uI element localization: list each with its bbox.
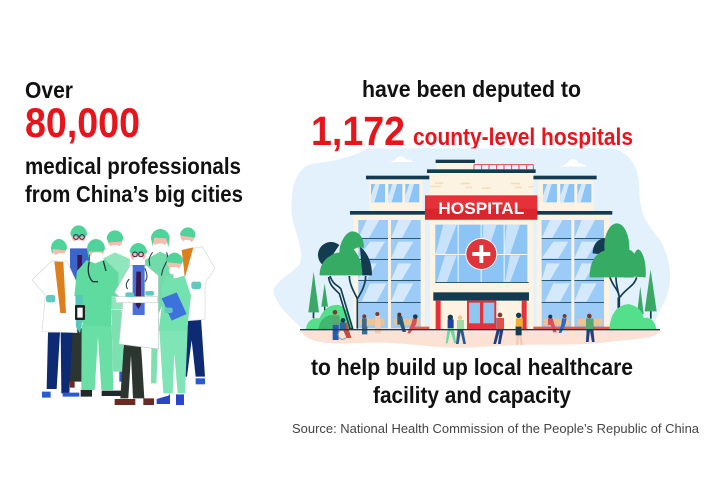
ground line <box>300 329 660 330</box>
heading: deputed to 1,172 county-level hospitals: have been deputed to <box>362 76 581 102</box>
hospital sign: HOSPITAL <box>438 199 524 218</box>
tree right <box>590 223 646 329</box>
central glass window <box>435 225 529 283</box>
icon: red cross <box>465 238 497 270</box>
tree left <box>318 231 372 329</box>
small cypress trees and bushes left <box>306 272 353 329</box>
ground <box>301 330 660 348</box>
figure: front green scrubs man <box>74 239 122 397</box>
heading: over 80,000 medical professionals: from China’s big cities <box>25 181 243 207</box>
heading: deputed to 1,172 county-level hospitals: 1,172 <box>311 108 405 154</box>
figure: back right nurse <box>145 229 175 383</box>
clouds <box>388 156 586 167</box>
building: side wings <box>350 176 612 329</box>
building: central tower <box>427 160 536 329</box>
windows: left wing <box>358 220 421 328</box>
illustration: medical team <box>32 225 215 405</box>
hospital sign <box>425 195 537 220</box>
figure: front right nurse with clipboard <box>157 253 191 405</box>
figure: centre doctor with crossed arms <box>115 243 158 405</box>
heading: over 80,000 medical professionals: medical professionals <box>25 153 241 179</box>
heading: over 80,000 medical professionals: Over <box>25 77 73 103</box>
illustration: hospital scene <box>273 148 670 348</box>
background blob <box>273 148 670 330</box>
text: purpose <box>311 354 633 408</box>
small cypress trees and bushes right <box>609 269 657 329</box>
text: purpose: to help build up local healthcare <box>311 354 633 380</box>
figure: far right woman in white coat <box>180 227 215 384</box>
benches <box>359 319 602 325</box>
people <box>332 310 595 345</box>
heading: over 80,000 medical professionals <box>25 77 243 207</box>
windows: upper floors <box>371 184 591 202</box>
entrance <box>410 292 610 329</box>
figure: back left man with glasses <box>70 225 90 388</box>
heading: over 80,000 medical professionals: 80,000 <box>25 99 140 146</box>
figure: back centre nurse <box>103 230 130 382</box>
source note: Source: National Health Commission of the People’s Republic of China <box>292 421 700 436</box>
figure: left woman in white coat <box>32 239 79 398</box>
heading: deputed to 1,172 county-level hospitals: county-level hospitals <box>413 124 633 151</box>
text: purpose: facility and capacity <box>373 382 571 408</box>
windows: right wing <box>542 220 604 328</box>
heading: deputed to 1,172 county-level hospitals <box>311 76 633 154</box>
